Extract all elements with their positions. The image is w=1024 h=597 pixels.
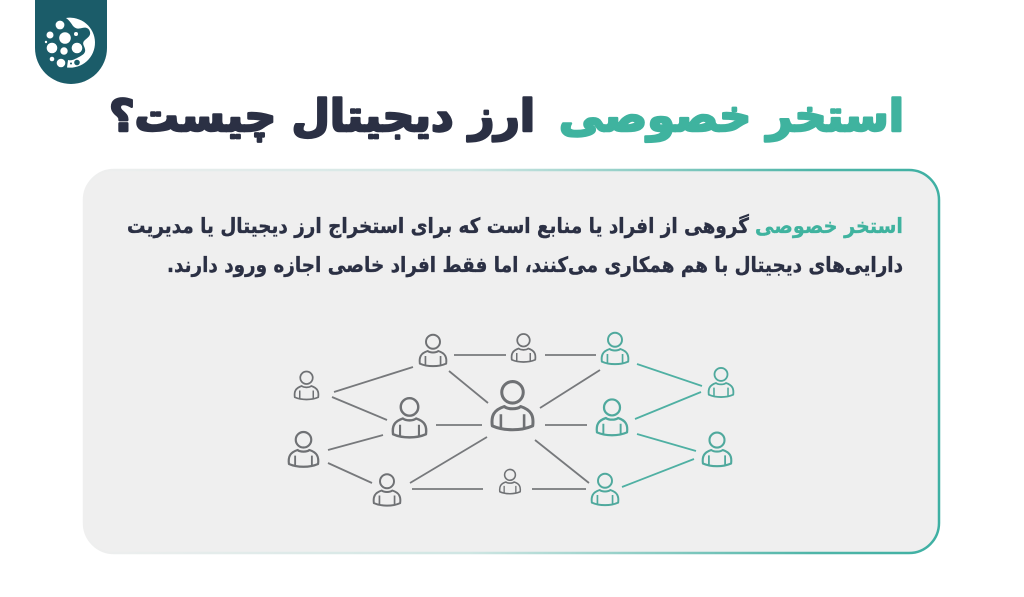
teal people xyxy=(592,333,733,505)
panel: definition card xyxy=(84,170,939,553)
gray people xyxy=(289,334,535,506)
icon: logo bubbles xyxy=(45,18,95,68)
teal connection lines xyxy=(622,364,702,487)
text block: definition xyxy=(127,213,903,277)
network diagram xyxy=(289,333,733,506)
title: dark part: ارز دیجیتال چیست؟ xyxy=(109,91,535,142)
teal lead term: استخر خصوصی xyxy=(755,214,903,238)
gray connection lines xyxy=(328,355,600,489)
title: teal part: استخر خصوصی xyxy=(559,91,904,142)
logo badge xyxy=(35,0,107,84)
definition line 1: گروهی از افراد یا منابع است که برای استخراج ارز دیجیتال یا مدیریت xyxy=(127,213,750,239)
title xyxy=(109,91,904,142)
definition line 2: دارایی‌های دیجیتال با هم همکاری می‌کنند، اما فقط افراد خاصی اجازه ورود دارند. xyxy=(167,253,903,277)
